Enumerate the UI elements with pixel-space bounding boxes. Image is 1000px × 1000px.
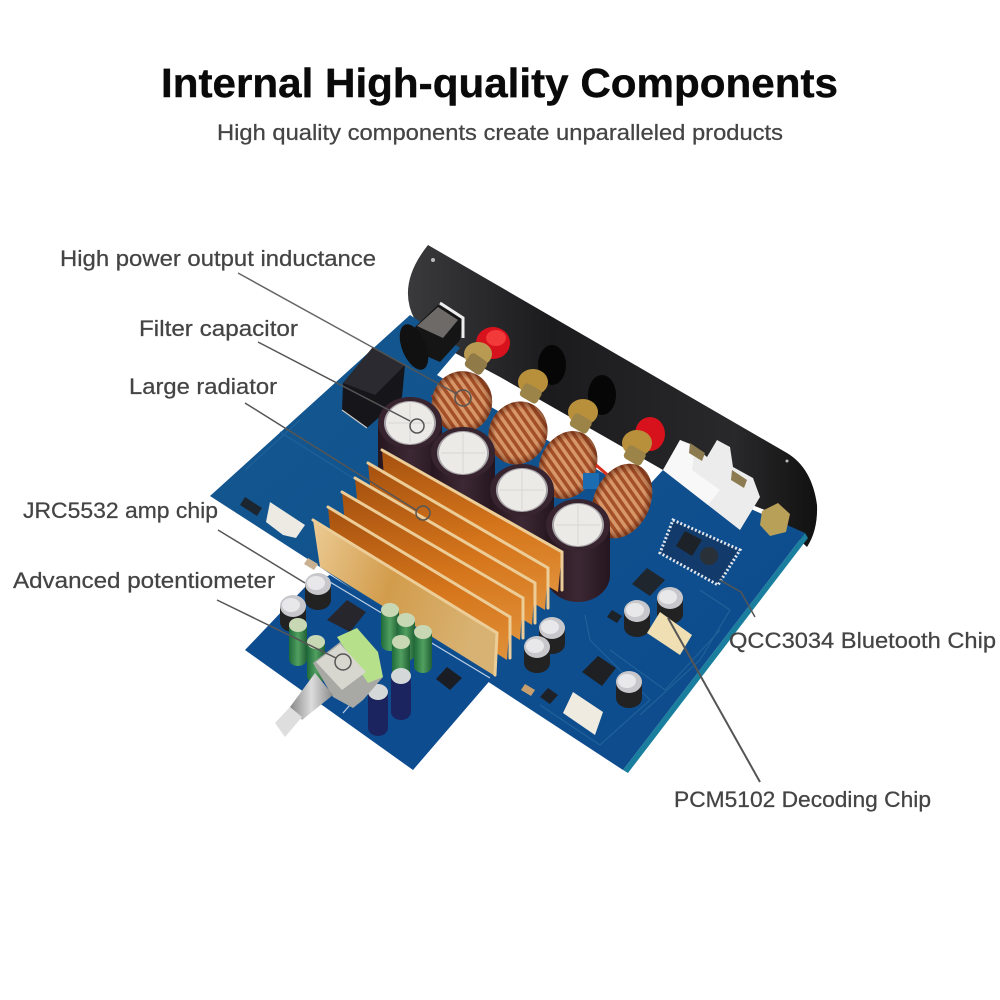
- label: filter capacitor: Filter capacitor: [139, 316, 298, 341]
- radiator fins: [313, 450, 562, 676]
- label: Bluetooth chip: QCC3034 Bluetooth Chip: [729, 628, 996, 653]
- label: amp chip: JRC5532 amp chip: [23, 498, 218, 523]
- label: radiator: Large radiator: [129, 374, 277, 399]
- JRC5532 chip: [327, 600, 366, 632]
- label: decoding chip: PCM5102 Decoding Chip: [674, 787, 931, 812]
- main circuit board edge: [623, 533, 808, 773]
- large electrolytic capacitors: [378, 397, 610, 602]
- line: decoding chip: [668, 618, 760, 782]
- panel screw holes: [431, 258, 788, 462]
- black rear panel: [408, 245, 817, 547]
- inductors: [422, 361, 664, 548]
- title: Internal High-quality Components: [161, 60, 838, 106]
- amp board capacitors: [280, 573, 432, 736]
- potentiometer: [275, 628, 383, 737]
- line: Bluetooth chip: [720, 580, 755, 617]
- audio amplifier board photo: [210, 245, 817, 773]
- main circuit board: [210, 315, 805, 770]
- binding posts: [463, 327, 665, 467]
- board traces: [245, 420, 730, 745]
- line: filter capacitor: [258, 342, 424, 433]
- optical socket: [415, 303, 463, 362]
- label: inductance: High power output inductance: [60, 246, 376, 271]
- line: radiator: [245, 403, 430, 520]
- lower right parts: [521, 617, 642, 735]
- aluminium radiator: [313, 450, 562, 676]
- small amp chip: [436, 667, 462, 690]
- line: potentiometer: [217, 600, 351, 670]
- white terminal block: [663, 440, 760, 530]
- potentiometer sub-board: [245, 575, 493, 770]
- black varistor: [394, 320, 434, 374]
- brass standoff: [760, 503, 790, 536]
- Bluetooth module: [660, 520, 740, 585]
- leader lines: [217, 273, 760, 782]
- PCM5102 decoding section: [607, 568, 692, 655]
- sub-board seam: [330, 582, 490, 713]
- line: amp chip: [218, 530, 305, 583]
- label: potentiometer: Advanced potentiometer: [13, 568, 275, 593]
- bottom-left connector and parts: [240, 497, 318, 570]
- relay: [342, 347, 405, 428]
- subtitle: High quality components create unparalleled products: [217, 120, 783, 145]
- line: inductance: [238, 273, 471, 406]
- rear socket holes: [538, 345, 616, 415]
- fin highlights: [313, 450, 562, 675]
